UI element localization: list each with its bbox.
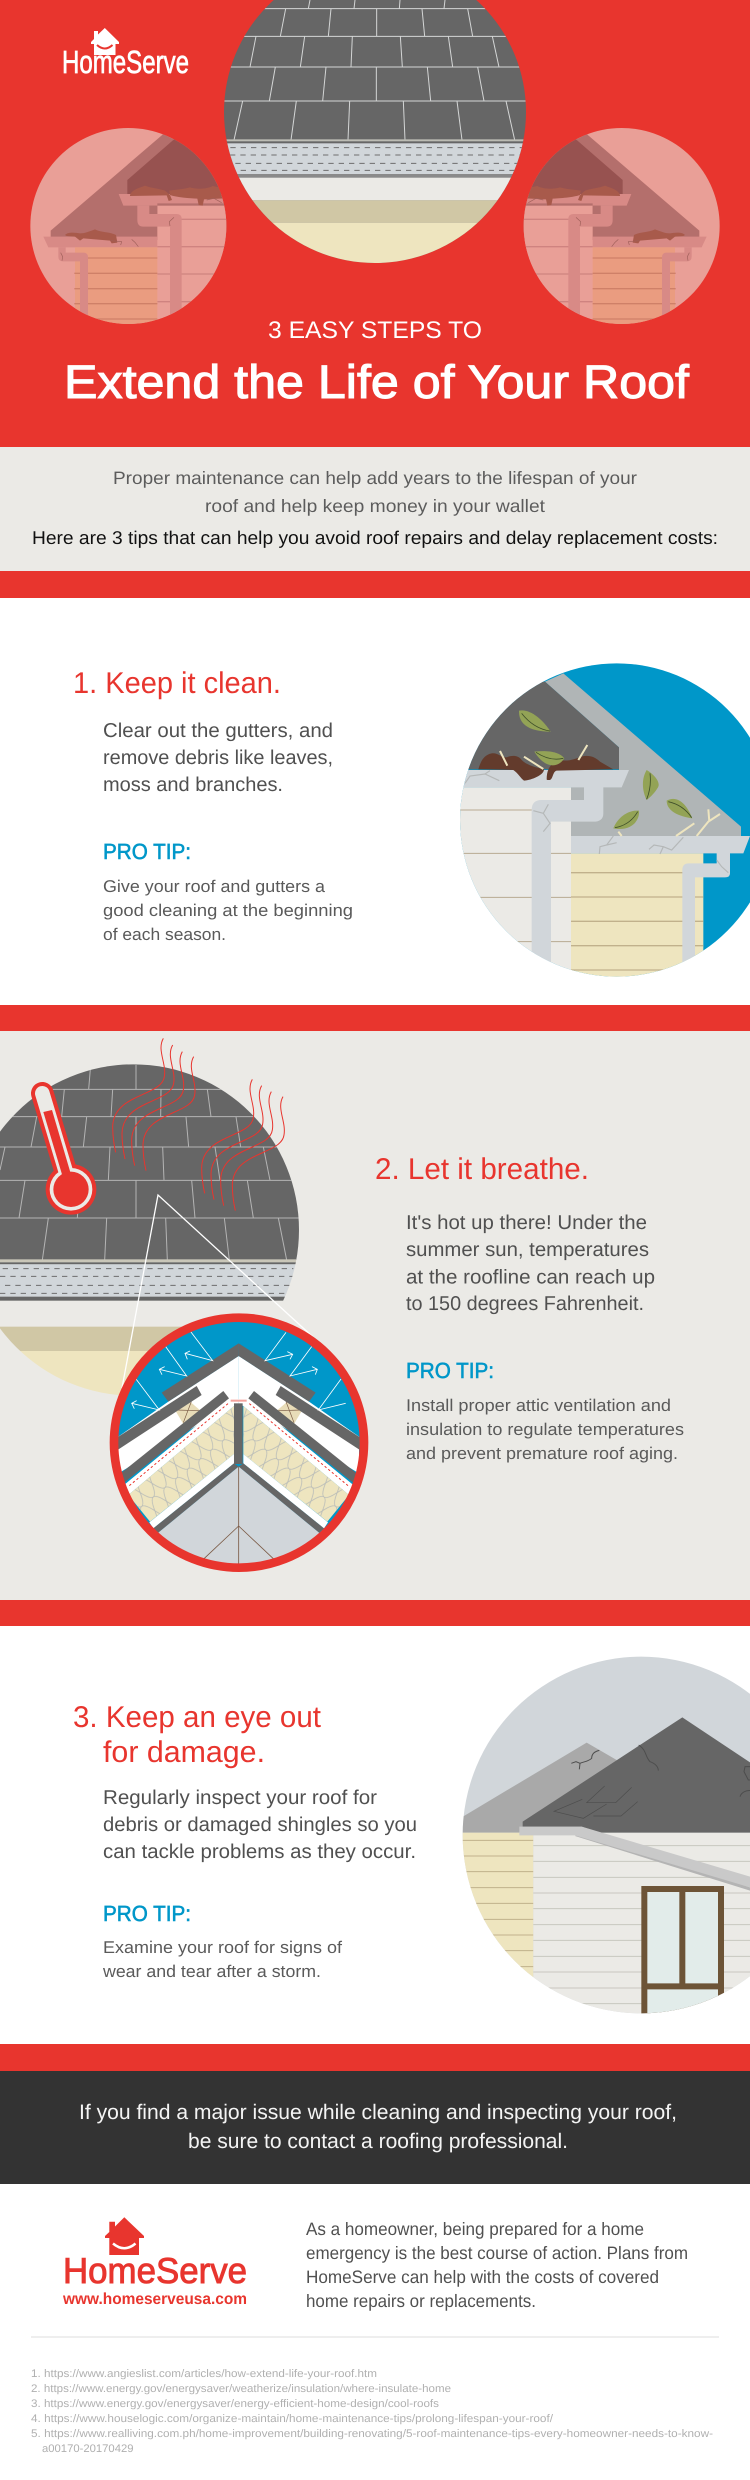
illustration: right gutter circle [524, 128, 720, 324]
text: step 3 body: Regularly inspect your roof for [103, 1787, 377, 1809]
text: footnotes [31, 2368, 713, 2455]
panel: call to action [0, 2071, 750, 2184]
illustration: damaged roof circle [460, 1653, 750, 2020]
heading: step 3: for damage. [103, 1736, 265, 1769]
text: step 2 body: to 150 degrees Fahrenheit. [406, 1293, 644, 1315]
panel: call to action: be sure to contact a roofing professional. [188, 2130, 568, 2153]
heading: step 3 pro tip: PRO TIP: [103, 1901, 191, 1926]
text: step 1 body: moss and branches. [103, 774, 283, 796]
illustration: hot roof circle [0, 1063, 303, 1398]
panel: step 1 [75, 663, 750, 977]
callout lines: roof to detail [122, 1195, 313, 1388]
text: step 2 tip [406, 1396, 684, 1463]
text: footnotes: 5. https://www.realliving.com.ph/home-improvement/building-renovating/5-roof-maintenance-tips-every-homeowner-needs-to-know- [31, 2428, 713, 2440]
text: step 1 tip: good cleaning at the beginning [103, 901, 353, 920]
text: homeowner message [306, 2219, 688, 2311]
text: footnotes: 3. https://www.energy.gov/energysaver/energy-efficient-home-design/cool-roofs [31, 2398, 440, 2410]
panel: intro: roof and help keep money in your wallet [205, 496, 545, 516]
text: step 3 tip [102, 1938, 342, 1981]
panel: intro [0, 447, 750, 571]
text: step 1 tip: Give your roof and gutters a [103, 877, 326, 896]
text: homeowner message: home repairs or replacements. [306, 2291, 536, 2311]
text: step 2 body: at the roofline can reach up [406, 1266, 655, 1288]
icon: HomeServe red logo: HomeServe [63, 2250, 247, 2291]
text: step 3 body [103, 1787, 417, 1863]
heading: step 2 pro tip: PRO TIP: [406, 1358, 494, 1383]
subtitle: 3 EASY STEPS TO [268, 317, 482, 344]
icon: HomeServe red logo [62, 2217, 247, 2308]
text: step 2 body [406, 1212, 655, 1315]
text: step 1 tip: of each season. [103, 925, 226, 944]
text: step 1 body: Clear out the gutters, and [103, 720, 333, 742]
illustration: attic ventilation detail circle [113, 1313, 367, 1573]
heading: step 2: 2. Let it breathe. [375, 1153, 589, 1186]
text: homeowner message: HomeServe can help with the costs of covered [306, 2267, 659, 2287]
text: step 2 tip: Install proper attic ventilation and [406, 1396, 671, 1415]
text: step 2 tip: insulation to regulate temperatures [406, 1420, 684, 1439]
icon: HomeServe white logo [62, 28, 189, 80]
text: step 3 tip: Examine your roof for signs of [103, 1938, 342, 1957]
icon: HomeServe white logo: HomeServe [62, 44, 189, 80]
heading: step 1: 1. Keep it clean. [73, 667, 281, 700]
text: step 3 tip: wear and tear after a storm. [102, 1962, 321, 1981]
text: step 1 body [103, 720, 333, 796]
heading: step 3 [73, 1701, 322, 1769]
panel: intro: Proper maintenance can help add years to the lifespan of your [113, 468, 637, 488]
text: footnotes: 2. https://www.energy.gov/energysaver/weatherize/insulation/where-insulate-home [31, 2383, 451, 2395]
panel: intro: Here are 3 tips that can help you avoid roof repairs and delay replacement costs: [32, 527, 718, 548]
text: homeowner message: emergency is the best course of action. Plans from [306, 2243, 688, 2263]
text: step 2 body: summer sun, temperatures [406, 1239, 649, 1261]
text: step 2 tip: and prevent premature roof aging. [406, 1444, 678, 1463]
text: step 1 body: remove debris like leaves, [103, 747, 333, 769]
illustration: clogged gutters circle [460, 663, 750, 977]
illustration: left gutter circle [30, 128, 226, 324]
header background [0, 0, 750, 447]
icon: HomeServe red logo: www.homeserveusa.com [62, 2291, 247, 2308]
heading: step 1 pro tip: PRO TIP: [103, 839, 191, 864]
text: homeowner message: As a homeowner, being prepared for a home [306, 2219, 644, 2239]
text: step 3 body: can tackle problems as they occur. [103, 1841, 416, 1863]
text: footnotes: a00170-20170429 [42, 2443, 134, 2455]
text: footnotes: 1. https://www.angieslist.com/articles/how-extend-life-your-roof.htm [31, 2368, 377, 2380]
panel: step 3 [74, 1656, 750, 2014]
heading: step 3: 3. Keep an eye out [73, 1701, 322, 1734]
text: step 1 tip [103, 877, 353, 944]
illustration: center roof shingles circle [220, 0, 530, 267]
title: Extend the Life of Your Roof [64, 355, 690, 408]
text: footnotes: 4. https://www.houselogic.com/organize-maintain/home-maintenance-tips/prolong-lifespan-your-roof/ [31, 2413, 554, 2425]
text: step 3 body: debris or damaged shingles so you [103, 1814, 417, 1836]
icon: heat waves [113, 1038, 284, 1211]
icon: thermometer [42, 1093, 96, 1215]
panel: step 2 [0, 1031, 750, 1600]
panel: call to action: If you find a major issue while cleaning and inspecting your roof, [79, 2101, 677, 2124]
text: step 2 body: It's hot up there! Under the [406, 1212, 647, 1234]
